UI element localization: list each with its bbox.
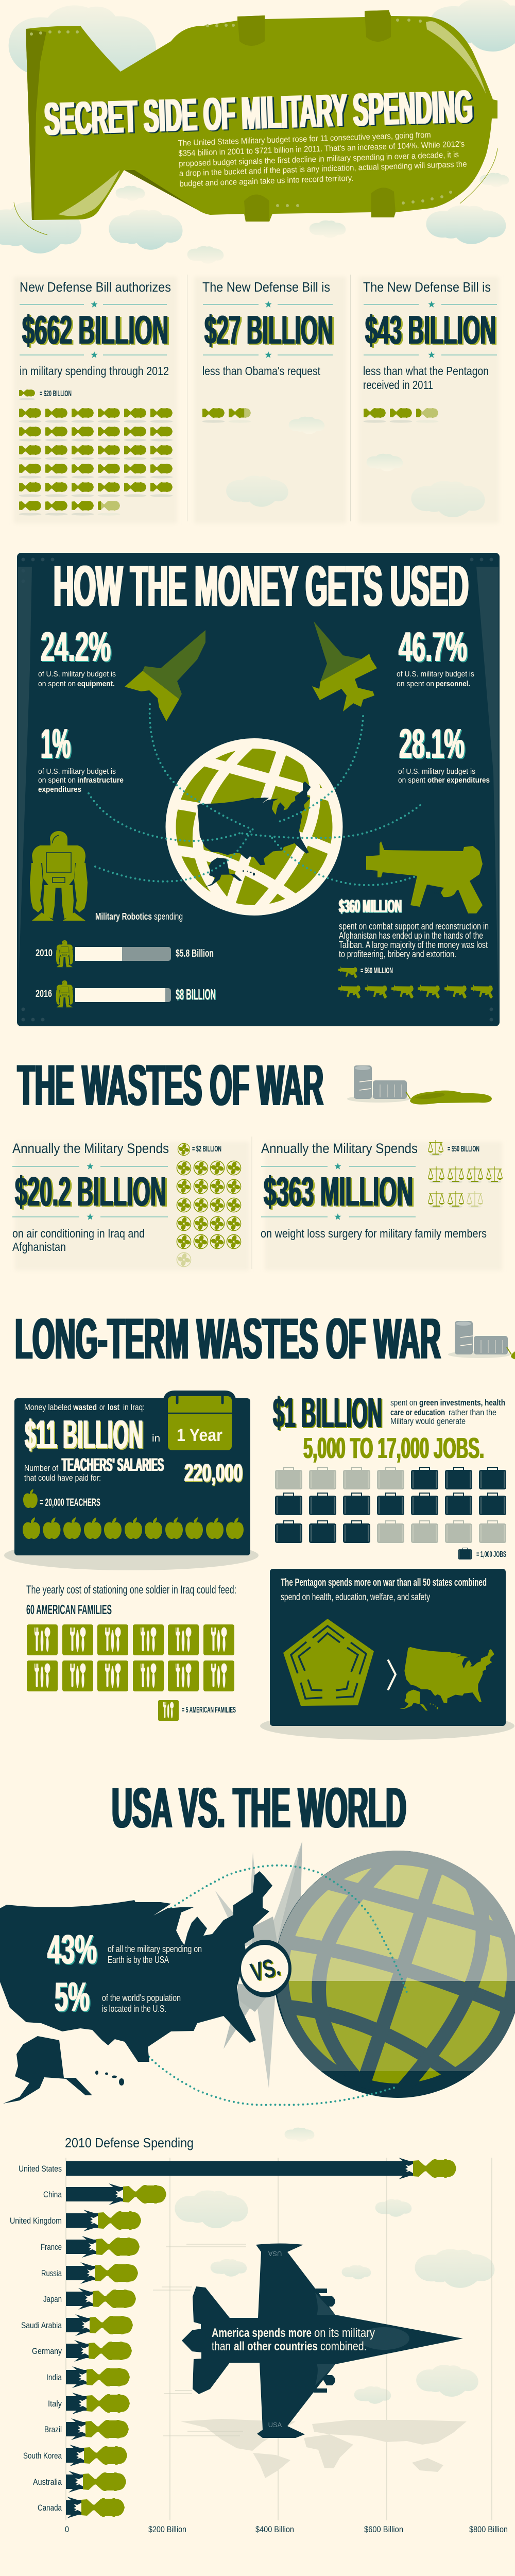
stat: 43%: 43% [47, 1926, 97, 1972]
speed lines [153, 2244, 246, 2436]
stat: $1 billion jobs: care or education [390, 1408, 445, 1417]
stat: 220,000 [184, 1460, 243, 1488]
intro paragraph: The United States Military budget rose for 11 consecutive years, going from [178, 131, 431, 148]
dotted connectors [89, 704, 420, 885]
axis labels [65, 2524, 508, 2534]
pictogram: bombs [19, 408, 173, 516]
faint world map [181, 2419, 467, 2478]
hero clouds [0, 0, 515, 264]
stat: 5%: is located in the U.S. [102, 2004, 166, 2014]
icon: calendar: 1 Year [177, 1426, 222, 1445]
icon: fighter jet [312, 621, 377, 711]
stat: 46.7% personnel: on spent on [397, 680, 434, 688]
bar: robotics 2010: $5.8 Billion [176, 948, 214, 959]
icon: missile [125, 630, 205, 721]
bars: countries: Russia [41, 2268, 62, 2278]
intro paragraph: budget and once again take us into record territory. [179, 174, 354, 189]
callout: america spends more: on its military [314, 2326, 375, 2340]
text: teachers salaries: TEACHERS' SALARIES [62, 1455, 164, 1475]
stat: $360 million: $360 MILLION [339, 896, 402, 917]
stat: 5%: 5% [55, 1974, 90, 2020]
stat: 28.1% other: of U.S. military budget is [398, 767, 475, 776]
badge: vs: VS. [248, 1952, 283, 1987]
bars: countries: South Korea [23, 2451, 62, 2461]
stat: 43%: of all the military spending on [108, 1944, 202, 1954]
stat: $11 billion: $11 BILLION [25, 1412, 143, 1457]
stat: 46.7% personnel: 46.7% [400, 625, 468, 671]
text: yearly cost of one soldier: The yearly cost of stationing one soldier in Iraq could feed: [26, 1583, 236, 1596]
icon: fighter jet silhouette: USA [268, 2421, 282, 2429]
intro paragraph: proposed budget signals the first decline in military spending in over a decade, it is [179, 150, 459, 168]
intro paragraph: a drop in the bucket and if the past is any indication, actual spending will surpass the [179, 160, 467, 178]
stat: 24.2% equipment: of U.S. military budget is [38, 670, 116, 679]
panel: how the money gets used [17, 553, 500, 1026]
text: money labeled wasted or lost: wasted [73, 1402, 97, 1412]
icon: globe with USA [171, 742, 338, 912]
icon: fighter jet silhouette [182, 2243, 463, 2438]
stat: 1% infrastructure [38, 721, 124, 794]
bars: countries: Germany [32, 2346, 62, 2356]
icon: pentagon [283, 1619, 374, 1706]
icon: big globe [274, 1851, 515, 2093]
text: yearly cost of one soldier [26, 1583, 236, 1617]
stat: $1 billion jobs: spent on [390, 1398, 417, 1408]
stat: 28.1% other: 28.1% [400, 722, 466, 768]
bars: countries: United Kingdom [10, 2216, 62, 2226]
text: money labeled wasted or lost: Money labeled [24, 1402, 72, 1412]
panel: $662 billion: $662 BILLION [22, 307, 168, 352]
card: pentagon vs states: spend on health, education, welfare, and safety [281, 1592, 430, 1603]
label: military robotics spending: Military Robotics [95, 911, 152, 922]
icon: fighter jet silhouette: USA [268, 2250, 282, 2258]
text: money labeled wasted or lost: or [99, 1402, 105, 1412]
bars: countries: United States [19, 2164, 62, 2174]
stat: 46.7% personnel: 46.7% [399, 624, 467, 670]
card: pentagon vs states [260, 1569, 514, 1740]
intro paragraph: $354 billion in 2001 to $721 billion in 2011. That's an increase of 104%. While 2012's [178, 140, 465, 158]
dotted world arcs [141, 1866, 407, 2105]
bars: countries [10, 2158, 456, 2518]
chart clouds [175, 2128, 494, 2404]
stat: $1 billion jobs: $1 BILLION [274, 1391, 383, 1437]
panel: $43 billion: received in 2011 [363, 378, 433, 392]
stat: $1 billion jobs: Military would generate [390, 1416, 466, 1426]
badge: vs [239, 1940, 291, 1997]
panel: $43 billion: less than what the Pentagon [363, 364, 489, 378]
stat: $360 million: $360 MILLION [339, 897, 402, 917]
bars: countries: China [43, 2190, 62, 2199]
stat: 1% infrastructure: of U.S. military budget is [38, 767, 116, 776]
stat: 24.2% equipment: 24.2% [42, 625, 112, 671]
stat: $1 billion jobs: rather than the [449, 1408, 496, 1417]
stat: 46.7% personnel [397, 624, 474, 688]
stat: 43%: Earth is by the USA [108, 1955, 169, 1965]
bars: countries: Saudi Arabia [21, 2320, 62, 2330]
panel: $43 billion [358, 277, 499, 523]
bars: countries: France [41, 2242, 62, 2252]
arrow: greater than [388, 1660, 396, 1689]
stat: 24.2% equipment: on spent on [38, 680, 76, 688]
legend: $60 million gun [338, 967, 393, 978]
stat: $1 billion jobs [273, 1389, 505, 1465]
chart: 2010 defense spending: 2010 Defense Spending [65, 2135, 194, 2150]
stat: 28.1% other: 28.1% [399, 721, 465, 767]
panel: $27 billion: less than Obama's request [202, 364, 321, 378]
pictogram: scales [428, 1166, 503, 1208]
axis labels: $800 Billion [469, 2524, 508, 2534]
text: yearly cost of one soldier: 60 AMERICAN FAMILIES [26, 1602, 112, 1617]
pictogram: guns [338, 985, 493, 998]
bar: robotics 2010: 2010 [36, 948, 53, 959]
stat: 46.7% personnel: of U.S. military budget is [397, 670, 474, 679]
stat: $11 billion: $11 BILLION [26, 1413, 144, 1458]
pictogram: fans [177, 1161, 241, 1267]
badge: vs: VS. [249, 1953, 284, 1988]
stat: $1 billion jobs: $1 BILLION [273, 1389, 382, 1436]
stat: 24.2% equipment [38, 624, 116, 688]
callout: america spends more: all other countries [234, 2340, 318, 2353]
text: money labeled wasted or lost: in Iraq: [123, 1402, 145, 1412]
panel: $43 billion: The New Defense Bill is [363, 279, 491, 295]
pictogram: apples [23, 1517, 244, 1539]
text: teachers salaries [24, 1455, 164, 1483]
bars: countries: Australia [33, 2477, 62, 2487]
stat: $360 million [339, 896, 489, 959]
panel: $662 billion: New Defense Bill authorizes [20, 279, 171, 295]
card: $11 billion wasted [4, 1391, 259, 1570]
icon: barrels and dud bomb [448, 1321, 515, 1360]
panel: $662 billion: $662 BILLION [24, 308, 170, 353]
icon: military robot [30, 831, 88, 921]
axis labels: $600 Billion [364, 2524, 403, 2534]
legend: apple 20,000 teachers: = 20,000 TEACHERS [40, 1497, 100, 1509]
panel: $27 billion: $27 BILLION [206, 308, 335, 353]
legend: $60 million gun: = $60 MILLION [360, 967, 393, 975]
stat: 1% infrastructure: infrastructure [77, 776, 124, 785]
stat: 24.2% equipment: equipment. [77, 680, 115, 688]
pictogram: cutlery tiles [27, 1624, 234, 1691]
icon: calendar [168, 1395, 232, 1450]
bars: countries: Brazil [44, 2425, 62, 2434]
panel: air conditioning: $20.2 BILLION [15, 1168, 166, 1214]
bars: countries: Japan [43, 2294, 62, 2304]
legend: 5 american families: = 5 AMERICAN FAMILIES [182, 1706, 236, 1715]
legend: $50 billion scale: = $50 BILLION [448, 1145, 479, 1154]
panel: air conditioning [12, 1141, 249, 1270]
icon: usa map [399, 1636, 495, 1722]
stat: 220,000: 220,000 [185, 1461, 243, 1488]
icon: usa map large [0, 1871, 272, 2104]
bar: robotics 2010 [36, 940, 214, 967]
panel: $662 billion: in military spending through 2012 [20, 364, 169, 378]
panel: $662 billion [19, 282, 173, 516]
stat: 43% [47, 1926, 202, 1973]
text: teachers salaries: that could have paid for: [24, 1473, 101, 1483]
stat: 1% infrastructure: 1% [42, 722, 72, 768]
panel: air conditioning: on air conditioning in Iraq and [12, 1227, 145, 1240]
panel: $27 billion: $27 BILLION [204, 307, 333, 352]
legend: $20 billion bomb [19, 389, 72, 400]
stat: 28.1% other [398, 721, 490, 785]
text: money labeled wasted or lost: lost [108, 1402, 119, 1412]
stat: 1% infrastructure: expenditures [38, 785, 81, 794]
bars: countries: India [46, 2372, 62, 2382]
bars: countries: Canada [38, 2503, 62, 2513]
callout: america spends more [212, 2326, 375, 2353]
panel: weight loss surgery [261, 1140, 503, 1270]
legend: apple 20,000 teachers [23, 1489, 100, 1509]
legend: $50 billion scale [428, 1140, 479, 1156]
legend: 5 american families [158, 1700, 236, 1721]
panel: weight loss surgery: Annually the Military Spends [261, 1141, 418, 1156]
stat: 28.1% other: other expenditures [427, 776, 490, 785]
stat: $11 billion [25, 1412, 144, 1458]
chart: 2010 defense spending [10, 2128, 508, 2534]
axis labels: $400 Billion [255, 2524, 294, 2534]
label: military robotics spending: spending [154, 911, 183, 922]
stat: 1% infrastructure: 1% [41, 721, 71, 767]
callout: america spends more: combined. [320, 2340, 367, 2353]
bar: robotics 2016 [36, 980, 216, 1007]
icon: submachine gun [366, 841, 483, 913]
stat: 1% infrastructure: on spent on [38, 776, 76, 785]
panel: air conditioning: Afghanistan [12, 1240, 66, 1253]
panel: $27 billion [202, 282, 334, 507]
panel: air conditioning: $20.2 BILLION [16, 1170, 168, 1215]
hero bomb illustration [14, 10, 497, 235]
stat: 5%: of the world's population [102, 1993, 181, 2003]
intro paragraph [178, 129, 468, 189]
stat: 220,000: 220,000 [184, 1460, 243, 1487]
axis labels: 0 [65, 2524, 69, 2534]
axis labels: $200 Billion [148, 2524, 186, 2534]
stat: 28.1% other: on spent [398, 776, 426, 785]
panel: how the money gets used: $8 BILLION [176, 987, 216, 1004]
legend: $20 billion bomb: = $20 BILLION [40, 389, 72, 398]
legend: $2 billion fan: = $2 BILLION [192, 1145, 221, 1154]
panel: air conditioning: Annually the Military Spends [12, 1141, 169, 1156]
legend: 1,000 jobs [458, 1548, 506, 1560]
icon: barrels and dud bomb [347, 1065, 492, 1105]
callout: america spends more: than [212, 2340, 231, 2353]
pictogram: briefcases [275, 1467, 506, 1543]
illustration: compass star [215, 1841, 302, 2088]
stat: 24.2% equipment: 24.2% [41, 624, 111, 670]
callout: america spends more: America spends more [212, 2326, 312, 2340]
stat: $360 million: to profiteering, bribery and extortion. [339, 949, 456, 959]
card: $11 billion wasted: in [152, 1433, 160, 1444]
stat: 46.7% personnel: personnel. [436, 680, 470, 688]
stat: 5%: 5% [56, 1975, 91, 2021]
bar: robotics 2016: 2016 [36, 989, 52, 999]
stat: 5% [55, 1974, 181, 2021]
text: money labeled wasted or lost [24, 1402, 145, 1412]
panel: $27 billion: The New Defense Bill is [202, 279, 330, 295]
bars: countries: Italy [48, 2399, 62, 2409]
bar: robotics 2016: $8 BILLION [176, 987, 216, 1003]
text: teachers salaries: Number of [24, 1463, 58, 1473]
legend: $2 billion fan [178, 1143, 221, 1156]
stat: 43%: 43% [48, 1927, 98, 1973]
